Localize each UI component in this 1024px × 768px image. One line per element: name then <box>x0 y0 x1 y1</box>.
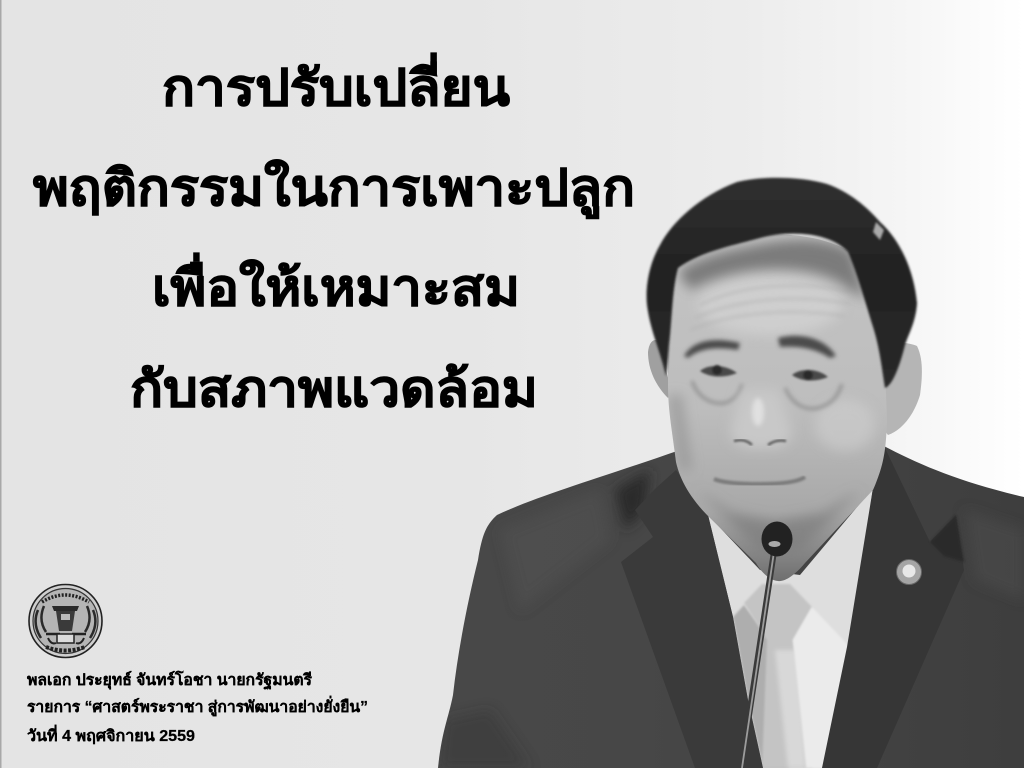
portrait: man in suit at microphone <box>438 178 1024 768</box>
text block: speaker and programme details <box>27 670 368 745</box>
text block: speaker and programme details: วันที่ 4 พฤศจิกายน 2559 <box>27 724 195 745</box>
title: การปรับเปลี่ยน <box>162 53 510 116</box>
nose <box>730 390 792 448</box>
title: เพื่อให้เหมาะสม <box>152 253 520 316</box>
soft hairline shadow <box>678 240 866 300</box>
lapel pin <box>896 560 922 584</box>
icon: government seal <box>29 584 102 658</box>
right lapel <box>822 446 964 768</box>
title: กับสภาพแวดล้อม <box>130 361 538 417</box>
forehead highlight <box>702 277 838 334</box>
jacket <box>438 446 1024 768</box>
jacket shading <box>440 470 1024 768</box>
eye bags <box>692 381 842 409</box>
microphone stem <box>741 545 775 768</box>
jaw shading <box>668 395 860 552</box>
neck shadow and face <box>668 234 887 581</box>
mouth <box>714 477 805 484</box>
eyebrows <box>684 336 836 358</box>
tie <box>733 584 848 768</box>
hair highlight <box>873 222 884 240</box>
text block: speaker and programme details: รายการ “ศาสตร์พระราชา สู่การพัฒนาอย่างยั่งยืน” <box>27 695 368 718</box>
left lapel <box>621 470 763 768</box>
text block: speaker and programme details: พลเอก ประยุทธ์ จันทร์โอชา นายกรัฐมนตรี <box>27 670 313 690</box>
hair <box>647 178 917 388</box>
title <box>33 53 635 417</box>
cheek highlights <box>818 404 872 450</box>
shirt <box>708 488 873 768</box>
title: พฤติกรรมในการเพาะปลูก <box>33 159 635 219</box>
eyes <box>700 365 828 381</box>
forehead wrinkles <box>714 286 820 318</box>
ears <box>648 340 672 398</box>
microphone head <box>762 522 792 556</box>
